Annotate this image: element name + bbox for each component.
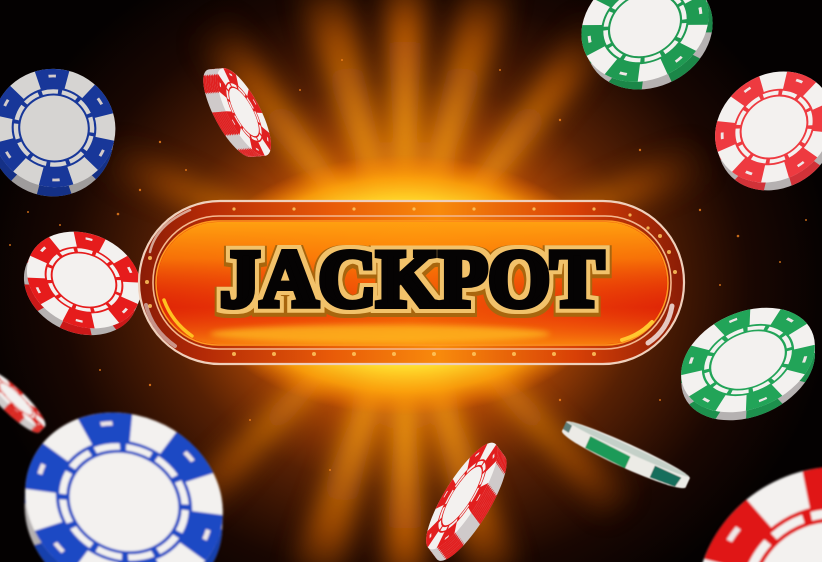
chip: red far left [0,365,51,438]
chip: green right [680,295,816,433]
chip: green top right [561,0,733,111]
chip: red narrow top [192,67,282,158]
badge glass rim [139,201,684,364]
chip: red top right [700,52,822,209]
chip: blue top left [0,58,126,208]
title: JACKPOT: JACKPOT [220,233,604,324]
badge inner bevel line [153,216,671,349]
light burst rays [95,0,720,562]
chip: red left [8,214,157,353]
chip: large red bottom right [643,416,822,562]
badge inner glow [210,325,550,343]
badge face shading [157,222,667,344]
chip: red narrow bottom [417,430,516,562]
sparkles [9,59,807,471]
chip top face sliver [567,419,690,480]
jackpot badge [139,201,684,364]
badge face [156,221,668,345]
chip side blocks [584,436,631,468]
chip: green narrow [559,416,692,495]
badge end highlights [146,210,672,346]
badge rim bulbs [145,207,677,356]
chip: large blue bottom left [21,401,226,562]
chip side band [559,416,692,495]
central glow [195,155,615,415]
